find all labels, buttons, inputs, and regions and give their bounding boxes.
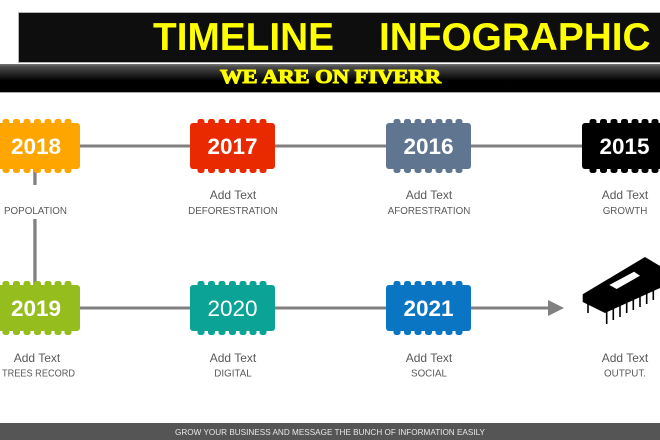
- chip: 2016: [386, 119, 471, 173]
- label: 2021: SOCIAL: [411, 368, 448, 380]
- label: 2019: TREES RECORD: [2, 368, 75, 380]
- subtitle: WE ARE ON FIVERR: [220, 66, 442, 88]
- label: 2015: GROWTH: [603, 206, 647, 217]
- subtitle band: [0, 64, 660, 93]
- chip: 2021: 2021: [403, 296, 454, 321]
- label: 2016: [388, 188, 470, 217]
- chip: 2019: 2019: [11, 296, 61, 321]
- label: 2015: Add Text: [602, 188, 649, 202]
- icon: integrated circuit: [583, 257, 660, 324]
- connector: top row line: [70, 144, 590, 148]
- chip: 2020: 2020: [207, 296, 258, 321]
- chip: 2020: [190, 281, 275, 335]
- title: INFOGRAPHIC: [379, 16, 651, 59]
- label: 2021: [406, 351, 453, 380]
- label: 2020: Add Text: [210, 351, 257, 365]
- connector: vertical upper: [33, 165, 37, 185]
- label: 2019: [2, 351, 75, 380]
- arrow: bottom row: [70, 300, 564, 316]
- chip: 2018: 2018: [11, 134, 61, 159]
- header title panel: [18, 12, 660, 62]
- label: 2016: AFORESTRATION: [388, 206, 470, 217]
- label: 2017: Add Text: [210, 188, 257, 202]
- label: 2016: Add Text: [406, 188, 453, 202]
- chip: 2019: [0, 281, 80, 335]
- label: 2021: Add Text: [406, 351, 453, 365]
- chip: 2017: [190, 119, 275, 173]
- label: 2019: Add Text: [14, 351, 61, 365]
- label: 2017: [188, 188, 278, 217]
- footer text: GROW YOUR BUSINESS AND MESSAGE THE BUNCH OF INFORMATION EASILY: [175, 427, 485, 437]
- chip: 2016: 2016: [403, 134, 454, 159]
- connector: vertical lower: [33, 219, 37, 289]
- chip: 2021: [386, 281, 471, 335]
- chip: 2015: 2015: [599, 134, 650, 159]
- label: 2020: DIGITAL: [214, 368, 252, 380]
- label: 2015: [602, 188, 649, 217]
- label: 2018: POPOLATION: [4, 206, 67, 217]
- chip: 2018: [0, 119, 80, 173]
- label: output: [602, 351, 649, 380]
- title: TIMELINE: [153, 16, 334, 59]
- label: output: OUTPUT.: [604, 368, 646, 380]
- label: 2017: DEFORESTRATION: [188, 206, 278, 217]
- chip: 2017: 2017: [207, 134, 258, 159]
- label: output: Add Text: [602, 351, 649, 365]
- chip: 2015: [582, 119, 660, 173]
- footer bar: [0, 423, 660, 440]
- label: 2020: [210, 351, 257, 380]
